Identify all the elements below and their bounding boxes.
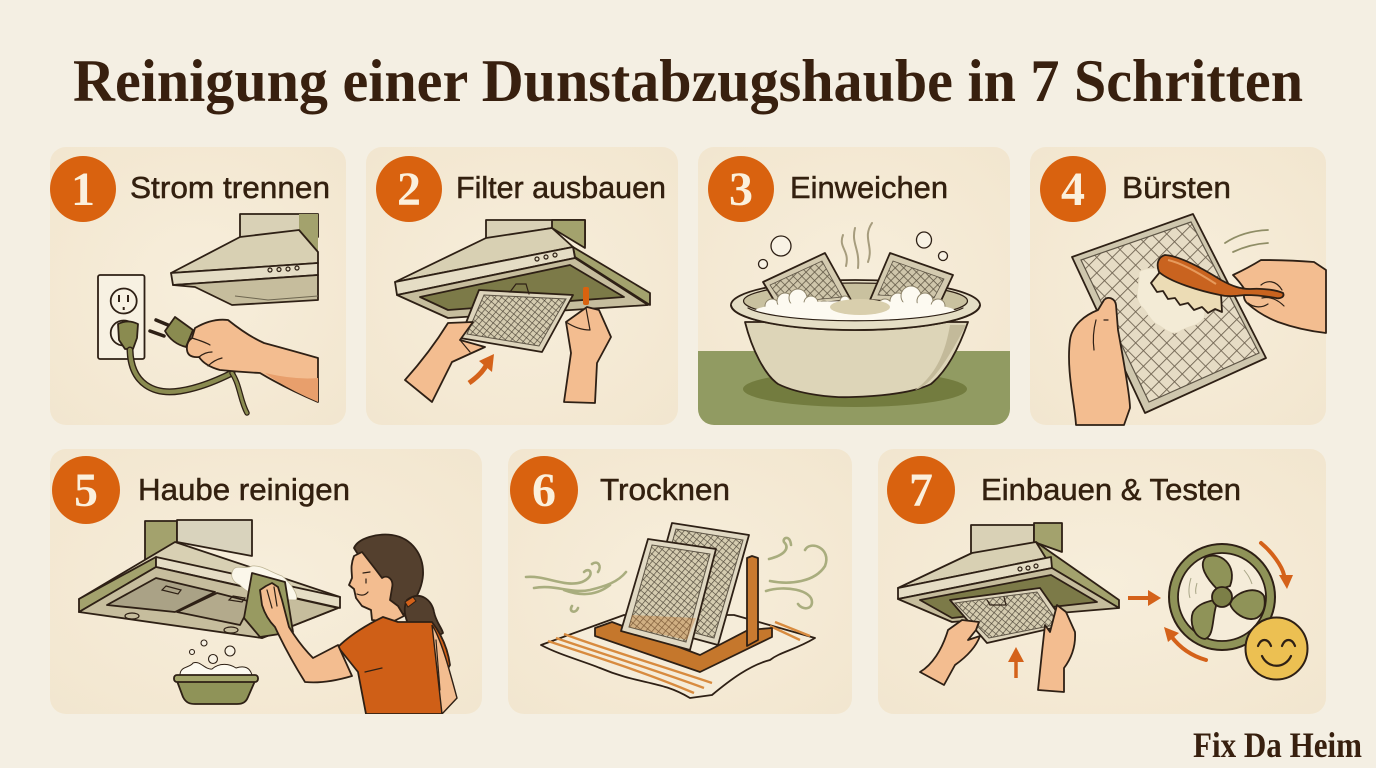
icon: smiley [1246,618,1308,680]
panel: step 3 Einweichen [698,147,1010,425]
badge: number 4 [1040,156,1106,222]
badge: number 4: 4 [1061,163,1085,216]
heading: Bürsten: Bürsten [1122,170,1231,205]
panel: step 5 Haube reinigen [50,449,482,714]
badge: number 5 [52,456,120,524]
arrow: rotation top [1261,543,1293,589]
arrow: right to fan [1128,590,1161,606]
icon: bubbles and steam [758,223,948,268]
foam on hood [232,566,297,600]
icon: left wind swirls [526,563,626,612]
icon: fan [1169,544,1275,650]
icon: unplugged plug in hand [150,317,318,402]
heading: Haube reinigen: Haube reinigen [138,472,350,507]
badge: number 5: 5 [74,464,98,517]
heading: Filter ausbauen: Filter ausbauen [456,170,666,205]
icon: range hood [898,523,1119,622]
panel: step 1 Strom trennen [50,147,346,425]
panel: step 4 Bürsten [1030,147,1326,425]
icon: basin with foam [174,640,258,704]
panel: step 7 Einbauen & Testen [878,449,1326,714]
table surface [698,351,1010,425]
title: Reinigung einer Dunstabzugshaube in 7 Schritten [73,48,1303,114]
arrow: upward [1008,647,1024,678]
icon: range hood being wiped [79,520,340,638]
badge: number 7 [887,456,955,524]
badge: number 1 [50,156,116,222]
icon: olive cloth [244,573,293,637]
panel: step 2 Filter ausbauen [366,147,678,425]
heading: Trocknen: Trocknen [600,472,730,507]
badge: number 3 [708,156,774,222]
icon: metal grease filter [460,284,573,352]
panel: step 6 Trocknen [508,449,852,714]
heading: Einweichen: Einweichen [790,170,948,205]
badge: number 2: 2 [397,163,421,216]
icon: right wind swirls [766,538,826,608]
icon: striped drying towel [541,615,815,698]
icon: filter being installed [950,588,1066,643]
icon: wall outlet with plug [98,275,247,413]
arrow: rotation bottom [1164,627,1206,660]
badge: number 2 [376,156,442,222]
icon: wooden brush [1151,255,1283,313]
arrow: lift filter [469,354,494,383]
icon: range hood with open underside [395,220,650,318]
icon: hands holding filter [405,307,611,403]
icon: orange latch [583,287,589,305]
icon: left hand holding filter [1069,298,1130,425]
heading: Strom trennen: Strom trennen [130,170,330,205]
badge: number 3: 3 [729,163,753,216]
badge: number 1: 1 [71,163,95,216]
icon: fingers over brush handle [1248,282,1284,307]
icon: large mesh filter [1072,214,1266,413]
foam patch [1137,268,1205,333]
motion lines [1225,230,1268,252]
icon: right hand holding brush [1233,260,1326,333]
icon: wooden rack and filters [595,523,772,672]
badge: number 7: 7 [909,464,933,517]
icon: wash basin with soaking filters [731,253,980,397]
icon: hands installing filter [920,605,1075,692]
icon: woman in orange shirt [260,535,457,714]
heading: Einbauen & Testen: Einbauen & Testen [981,472,1241,507]
badge: number 6: 6 [532,464,556,517]
icon: range hood [171,214,318,305]
badge: number 6 [510,456,578,524]
